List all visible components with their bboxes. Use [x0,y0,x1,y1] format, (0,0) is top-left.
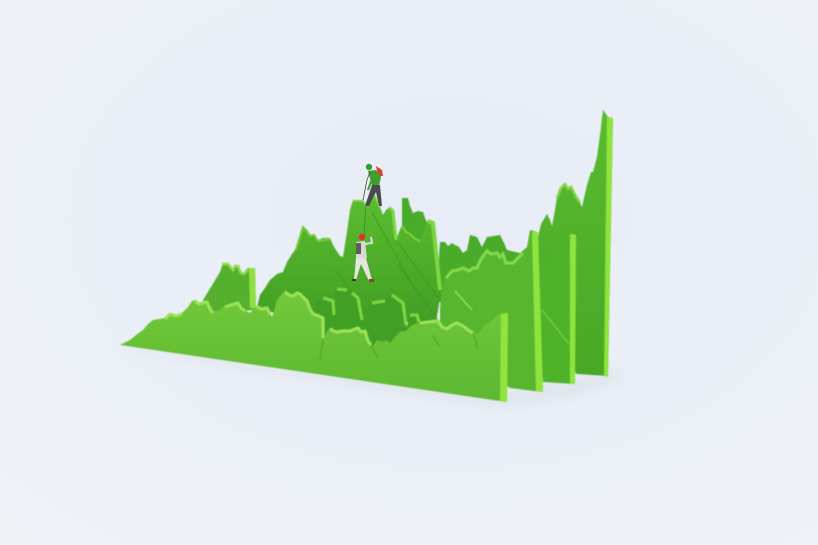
panel: low central bumps [313,289,424,350]
small hill right edge [249,268,256,308]
diagonal print marks [335,212,440,330]
peak edges [390,208,396,240]
second ridge right edge [532,232,543,392]
icon: upper climber with green helmet and red pack [363,164,383,206]
panel: climbing peak ridge [257,195,441,330]
panel: far-left small hill [203,263,256,312]
small hill crest [222,264,248,274]
panel: third ridge [535,233,576,384]
scratch [455,291,472,310]
third ridge print mark [542,310,569,344]
second ridge crest [446,251,523,278]
icon: lower climber with red helmet on rope [352,205,374,282]
front ridge crest highlights [165,292,473,345]
panel: tallest back ridge [538,110,613,377]
back ridge right edge [604,117,613,377]
floor shadow under the chart [130,345,625,406]
bump crests [323,289,419,325]
front ridge dark steps [320,333,478,360]
chart: layered green panels [120,110,613,402]
panel: rear upper ridge [402,198,432,260]
third ridge right edge [570,234,576,384]
front ridge right edge [500,313,508,402]
panel: distant peaks behind the middle [436,235,525,320]
panel: front ridge [120,291,508,402]
panel: second ridge [440,230,543,392]
back ridge crest [557,184,580,203]
